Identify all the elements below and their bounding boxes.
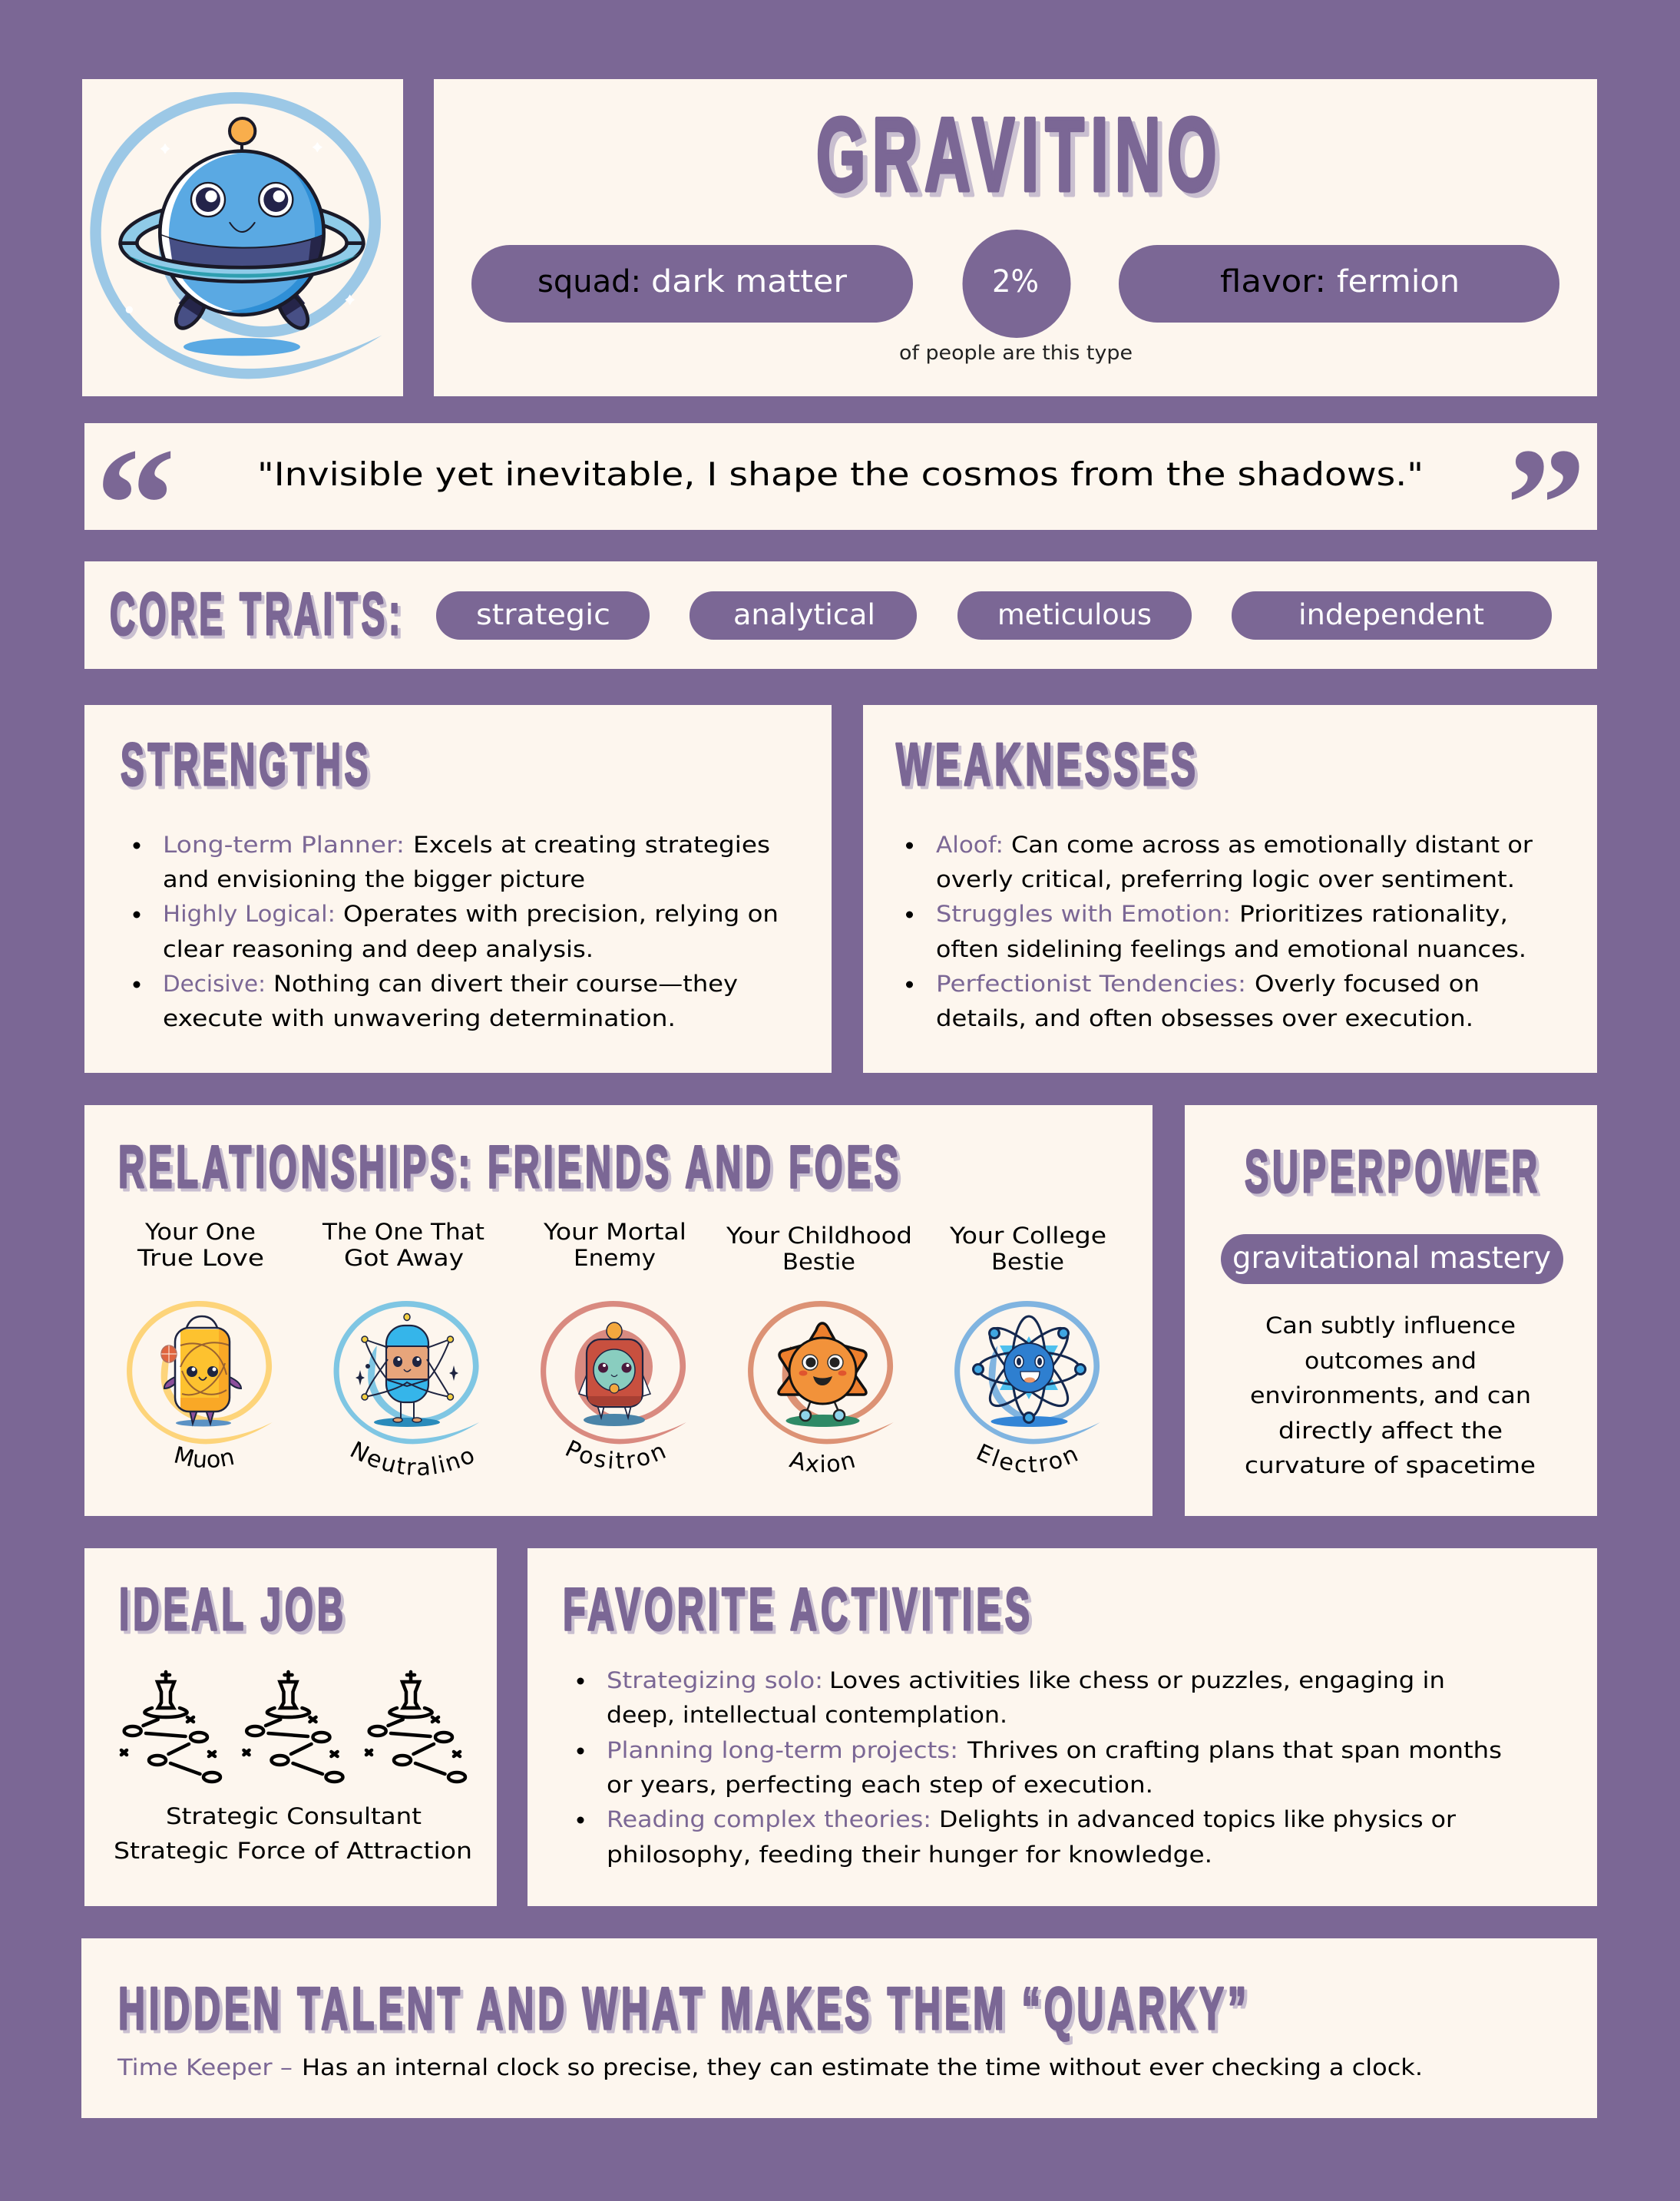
list: strengths: clear reasoning and deep analysis.: [163, 936, 594, 962]
pill: flavor: fermion: [1337, 264, 1460, 300]
pill: meticulous: [957, 591, 1192, 640]
pill: squad: [471, 245, 913, 323]
character: axion: Axion: [789, 1451, 855, 1472]
panel: relationships: [84, 1105, 1153, 1516]
character: neutralino: Neutralino: [350, 1441, 473, 1476]
panel: core traits: [84, 561, 1597, 669]
list: weaknesses: Can come across as emotionally distant or: [1011, 832, 1533, 858]
list: weaknesses: Perfectionist Tendencies:: [936, 971, 1246, 997]
text: time keeper: Time Keeper –: [117, 2054, 293, 2080]
text: time keeper: Has an internal clock so precise, they can estimate the time without ever checking a clock.: [302, 2054, 1423, 2080]
list: strengths: Long-term Planner:: [163, 832, 405, 858]
list: strengths: [134, 832, 779, 1031]
panel: superpower: [1185, 1105, 1597, 1516]
pill: flavor: [1119, 245, 1559, 323]
list: activities: Reading complex theories:: [607, 1806, 931, 1832]
character: axion: Your Childhood: [726, 1223, 912, 1249]
text: superpower description: Can subtly influence: [1265, 1312, 1516, 1339]
icon: chess strategy 2: [244, 1672, 342, 1782]
text: superpower description: [1245, 1312, 1536, 1478]
character: neutralino: Got Away: [344, 1245, 464, 1271]
icon: closing quote mark: ”: [1506, 415, 1586, 594]
list: weaknesses: Struggles with Emotion:: [936, 901, 1231, 927]
text: superpower description: outcomes and: [1305, 1348, 1477, 1374]
character: electron: Your College: [949, 1223, 1106, 1249]
panel: quote: [84, 415, 1597, 594]
list: activities: or years, perfecting each step of execution.: [607, 1772, 1153, 1798]
heading: FAVORITE ACTIVITIES: [563, 1575, 1033, 1643]
pill: meticulous: meticulous: [997, 598, 1152, 631]
pill: gravitational mastery: [1221, 1234, 1563, 1284]
icon: chess strategy 3: [366, 1672, 465, 1782]
character: muon: Muon: [175, 1446, 233, 1468]
quote text: "Invisible yet inevitable, I shape the cosmos from the shadows.": [257, 455, 1424, 493]
character: positron: [541, 1219, 686, 1468]
panel: hidden talent: [81, 1938, 1597, 2118]
character: axion: Bestie: [782, 1249, 855, 1275]
pill: independent: independent: [1298, 598, 1484, 631]
list: strengths: Operates with precision, relying on: [343, 901, 779, 927]
character: positron: Positron: [565, 1439, 666, 1468]
text: superpower description: environments, and can: [1250, 1382, 1531, 1408]
list: weaknesses: details, and often obsesses over execution.: [936, 1005, 1473, 1031]
list: activities: philosophy, feeding their hunger for knowledge.: [607, 1842, 1212, 1868]
badge: 2 percent: [963, 230, 1070, 338]
character: muon: [127, 1219, 272, 1468]
character: neutralino: [322, 1219, 484, 1476]
heading: RELATIONSHIPS: FRIENDS AND FOES: [118, 1133, 902, 1200]
character: neutralino: The One That: [322, 1219, 484, 1245]
list: activities: Loves activities like chess or puzzles, engaging in: [829, 1667, 1445, 1693]
pill: gravitational mastery: gravitational mastery: [1232, 1241, 1551, 1276]
icon: chess strategy 1: [121, 1672, 220, 1782]
text: job titles: [114, 1803, 472, 1864]
icon: opening quote mark: “: [95, 415, 176, 594]
pill: strategic: strategic: [476, 598, 610, 631]
panel: logo: [82, 79, 403, 396]
pill: strategic: [436, 591, 650, 640]
pill: squad: squad:: [537, 264, 641, 300]
character: axion: [726, 1223, 912, 1472]
list: strengths: Excels at creating strategies: [413, 832, 770, 858]
heading: CORE TRAITS:: [110, 580, 404, 647]
character: electron: [949, 1223, 1106, 1473]
list: strengths: Nothing can divert their course—they: [273, 971, 738, 997]
list: activities: deep, intellectual contemplation.: [607, 1702, 1007, 1728]
list: activities: [577, 1667, 1502, 1868]
text: job titles: Strategic Consultant: [166, 1803, 422, 1829]
caption: of people: of people are this type: [899, 342, 1133, 365]
panel: strengths: [84, 705, 832, 1073]
pill: independent: [1232, 591, 1552, 640]
list: weaknesses: Aloof:: [936, 832, 1004, 858]
panel: ideal job: [84, 1548, 497, 1906]
list: activities: Delights in advanced topics like physics or: [939, 1806, 1456, 1832]
pill: squad: dark matter: [651, 264, 848, 300]
text: superpower description: directly affect the: [1278, 1418, 1503, 1444]
panel: weaknesses: [863, 705, 1597, 1073]
list: strengths: and envisioning the bigger picture: [163, 866, 585, 892]
badge: 2 percent: 2%: [992, 264, 1039, 300]
list: weaknesses: [906, 832, 1533, 1031]
pill: flavor: flavor:: [1220, 264, 1326, 300]
list: activities: Planning long-term projects:: [607, 1737, 958, 1763]
heading: IDEAL JOB: [119, 1575, 347, 1643]
pill: analytical: analytical: [733, 598, 875, 631]
list: activities: Strategizing solo:: [607, 1667, 823, 1693]
list: weaknesses: Prioritizes rationality,: [1239, 901, 1508, 927]
character: positron: Your Mortal: [543, 1219, 686, 1245]
panel: favorite activities: [527, 1548, 1597, 1906]
list: strengths: execute with unwavering determination.: [163, 1005, 676, 1031]
heading: WEAKNESSES: [896, 730, 1199, 798]
character: electron: Electron: [977, 1444, 1078, 1473]
list: weaknesses: often sidelining feelings and emotional nuances.: [936, 936, 1526, 962]
character: positron: Enemy: [574, 1245, 656, 1271]
title: GRAVITINO: [816, 96, 1223, 213]
character: muon: True Love: [137, 1245, 264, 1271]
text: superpower description: curvature of spacetime: [1245, 1452, 1536, 1478]
list: activities: Thrives on crafting plans that span months: [967, 1737, 1502, 1763]
character: muon: Your One: [144, 1219, 256, 1245]
heading: STRENGTHS: [121, 730, 372, 798]
inner ring behind positron: [576, 1329, 653, 1405]
list: weaknesses: Overly focused on: [1255, 971, 1480, 997]
text: job titles: Strategic Force of Attraction: [114, 1838, 472, 1864]
list: strengths: Highly Logical:: [163, 901, 336, 927]
pill: analytical: [690, 591, 917, 640]
character: electron: Bestie: [991, 1249, 1064, 1275]
list: strengths: Decisive:: [163, 971, 266, 997]
icon: gravitino mascot: [90, 92, 382, 379]
list: weaknesses: overly critical, preferring logic over sentiment.: [936, 866, 1515, 892]
panel: header: [434, 79, 1597, 396]
